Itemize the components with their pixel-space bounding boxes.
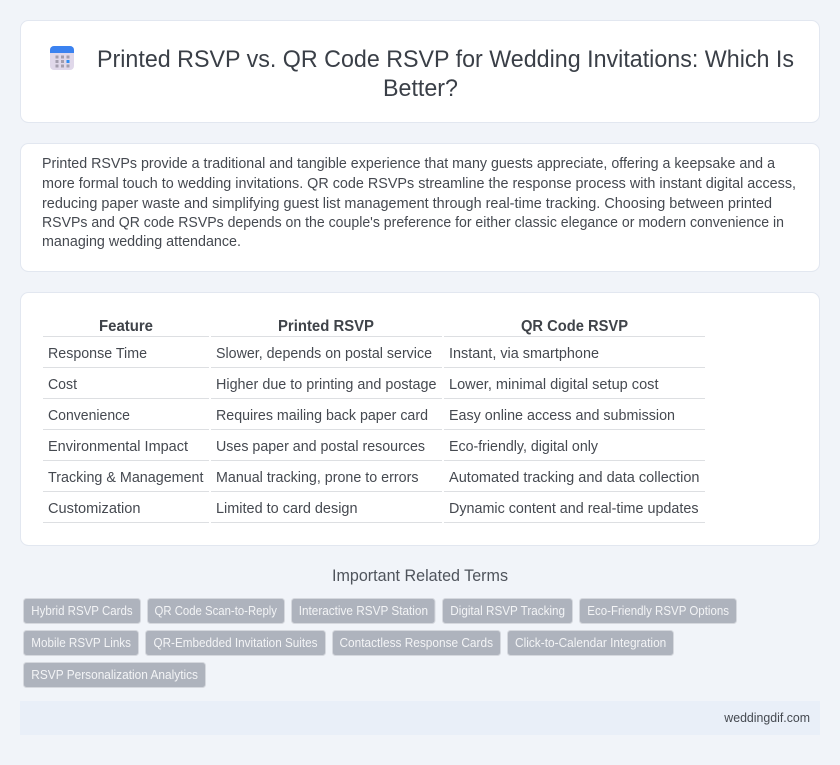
row: response time: Slower, depends on postal service <box>216 346 432 362</box>
intro paragraph <box>42 156 796 250</box>
related terms tags <box>24 598 736 688</box>
row: tracking and management <box>43 470 705 492</box>
row: customization: Dynamic content and real-time updates <box>449 501 698 517</box>
tag: contactless response cards <box>332 630 500 656</box>
panel: title header <box>20 20 820 122</box>
tag: interactive rsvp station <box>292 598 435 624</box>
title: Better? <box>383 75 458 102</box>
row: tracking and management: Manual tracking, prone to errors <box>216 470 418 486</box>
row: environmental impact: Environmental Impact <box>48 439 188 455</box>
row: response time <box>43 346 705 368</box>
footer source link: weddingdif.com <box>723 710 810 725</box>
row: tracking and management: Tracking & Management <box>48 470 204 486</box>
row: cost: Higher due to printing and postage <box>216 377 436 393</box>
tag: mobile rsvp links: Mobile RSVP Links <box>31 636 131 650</box>
row: cost: Cost <box>48 377 77 393</box>
intro paragraph: Printed RSVPs provide a traditional and tangible experience that many guests appreciate, offering a keepsake and a <box>42 156 776 172</box>
intro paragraph: managing wedding attendance. <box>42 234 241 250</box>
row: customization: Limited to card design <box>216 501 358 517</box>
footer <box>20 701 820 735</box>
panel: comparison table <box>20 292 820 546</box>
tag: hybrid rsvp cards <box>24 598 140 624</box>
intro paragraph: more formal touch to wedding invitations. QR code RSVPs streamline the response process with instant digital access, <box>42 176 796 192</box>
row: environmental impact: Uses paper and postal resources <box>216 439 425 455</box>
row: environmental impact: Eco-friendly, digital only <box>449 439 599 455</box>
row: tracking and management: Automated tracking and data collection <box>449 470 700 486</box>
tag: mobile rsvp links <box>24 630 138 656</box>
tag: rsvp personalization analytics <box>24 662 206 688</box>
panel: introduction <box>20 144 820 272</box>
table header row <box>43 318 705 337</box>
row: cost <box>43 377 705 399</box>
intro paragraph: RSVPs and QR code RSVPs depends on the couple's preference for either classic elegance or modern convenience in <box>42 215 784 231</box>
table header row: Feature <box>99 318 153 335</box>
row: convenience: Requires mailing back paper card <box>216 408 428 424</box>
row: customization <box>43 501 705 523</box>
row: environmental impact <box>43 439 705 461</box>
icon: calendar <box>50 46 74 70</box>
intro paragraph: reducing paper waste and simplifying guest list management through real-time tracking. Choosing between printed <box>42 196 772 212</box>
tag: eco-friendly rsvp options <box>580 598 736 624</box>
row: response time: Instant, via smartphone <box>449 346 599 362</box>
tag: rsvp personalization analytics: RSVP Personalization Analytics <box>31 668 198 682</box>
row: response time: Response Time <box>48 346 147 362</box>
tag: click-to-calendar integration: Click-to-Calendar Integration <box>515 636 666 650</box>
row: customization: Customization <box>48 501 140 517</box>
tag: qr-embedded invitation suites <box>146 630 326 656</box>
tag: contactless response cards: Contactless Response Cards <box>340 636 493 650</box>
tag: digital rsvp tracking <box>442 598 572 624</box>
table header row: Printed RSVP <box>278 318 374 335</box>
tag: interactive rsvp station: Interactive RSVP Station <box>299 604 428 618</box>
tag: qr-embedded invitation suites: QR-Embedded Invitation Suites <box>154 636 318 650</box>
tag: digital rsvp tracking: Digital RSVP Tracking <box>450 604 565 618</box>
title <box>97 46 794 102</box>
tag: eco-friendly rsvp options: Eco-Friendly RSVP Options <box>587 604 729 618</box>
heading: important related terms: Important Related Terms <box>332 567 508 585</box>
table header row: QR Code RSVP <box>521 318 628 335</box>
row: convenience <box>43 408 705 430</box>
tag: qr code scan-to-reply <box>148 598 284 624</box>
row: convenience: Convenience <box>48 408 130 424</box>
tag: hybrid rsvp cards: Hybrid RSVP Cards <box>31 604 133 618</box>
title: Printed RSVP vs. QR Code RSVP for Wedding Invitations: Which Is <box>97 46 794 73</box>
tag: click-to-calendar integration <box>508 630 674 656</box>
row: convenience: Easy online access and submission <box>449 408 675 424</box>
row: cost: Lower, minimal digital setup cost <box>449 377 658 393</box>
tag: qr code scan-to-reply: QR Code Scan-to-Reply <box>154 604 278 618</box>
